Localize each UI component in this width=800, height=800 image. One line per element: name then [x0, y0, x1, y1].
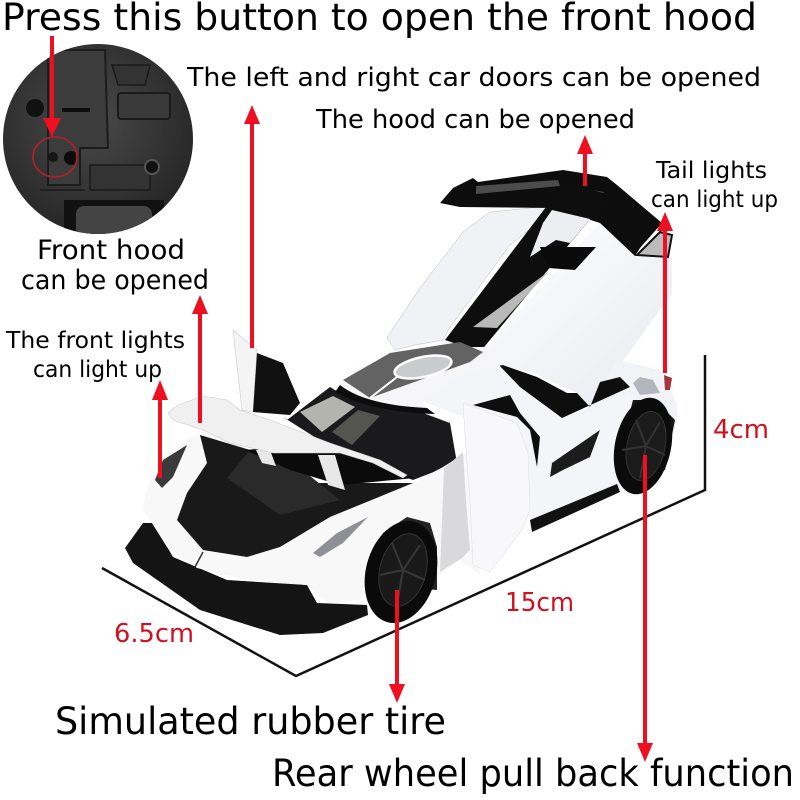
side skirt — [530, 484, 620, 532]
side vent — [550, 430, 600, 477]
windshield — [283, 387, 457, 480]
label: hood: The hood can be opened — [315, 105, 635, 135]
label: tail lights — [651, 158, 778, 213]
door strut frame — [445, 182, 610, 352]
rear top deck — [590, 360, 678, 490]
arrow: hood spoiler — [577, 135, 593, 186]
label: tail lights: Tail lights — [655, 158, 767, 184]
arrow: tail lights — [657, 212, 673, 373]
rear spoiler wing — [440, 170, 662, 256]
label: front hood: can be opened — [21, 265, 209, 296]
label: front lights — [5, 328, 185, 383]
arrow: rear wheel — [637, 455, 653, 762]
roof window — [393, 351, 453, 383]
front nose seam — [195, 552, 203, 567]
open hood — [168, 396, 407, 490]
label: front hood — [21, 235, 209, 296]
dimension: height: 4cm — [713, 415, 769, 445]
inset photo: hood button — [3, 44, 193, 240]
rear body — [420, 365, 633, 522]
car photo — [125, 170, 681, 635]
label: rubber tire: Simulated rubber tire — [55, 700, 446, 743]
roof stripe — [343, 342, 483, 398]
arrow: front lights — [152, 380, 168, 478]
raised door near side — [482, 222, 672, 407]
raised door far side — [387, 205, 560, 350]
arrow: hood button — [43, 36, 61, 137]
label: doors: The left and right car doors can be opened — [186, 63, 761, 93]
rear wheel — [605, 392, 681, 500]
label: front lights: The front lights — [5, 328, 185, 354]
splitter — [125, 523, 368, 635]
arrow: doors — [244, 105, 260, 348]
open door — [463, 403, 530, 572]
arrow: front hood — [192, 295, 208, 423]
dimension: length: 15cm — [505, 588, 574, 618]
red arrows — [43, 36, 673, 762]
label: tail lights: can light up — [651, 187, 778, 213]
front lights — [155, 445, 187, 488]
engine bay — [177, 435, 415, 557]
door jamb — [440, 452, 470, 572]
front body — [142, 420, 490, 603]
arrow: rubber tire — [389, 590, 405, 703]
roof — [335, 347, 503, 420]
dark gap below door — [497, 363, 630, 418]
tail light — [637, 232, 672, 257]
dimension lines — [102, 355, 705, 676]
front wheel — [354, 513, 448, 631]
dimension: width: 6.5cm — [114, 619, 194, 649]
left raised door — [233, 330, 300, 415]
label: front hood: Front hood — [37, 235, 185, 266]
label: front lights: can light up — [33, 357, 162, 383]
